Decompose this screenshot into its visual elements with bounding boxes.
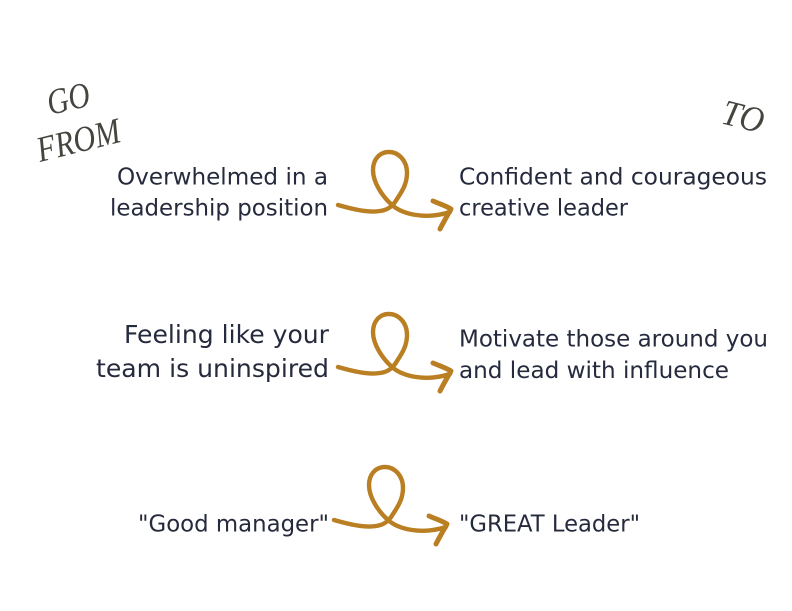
row 1 to text	[459, 164, 767, 222]
row 2 to text	[459, 326, 768, 384]
row 2 to text: Motivate those around you	[459, 326, 768, 352]
row 1 from text	[110, 164, 328, 222]
row 1 to text: creative leader	[459, 196, 629, 222]
row 2 to text: and lead with influence	[459, 358, 729, 384]
row 2 from text	[96, 320, 330, 383]
row 3 to text: "GREAT Leader"	[459, 512, 640, 538]
heading: GO FROM	[31, 74, 126, 170]
heading: GO FROM: GO	[43, 74, 94, 123]
row 3 arrow	[334, 467, 447, 544]
row 2 from text: Feeling like your	[124, 320, 330, 349]
row 3 from text: "Good manager"	[138, 512, 329, 538]
row 1 from text: Overwhelmed in a	[117, 164, 328, 190]
row 2 from text: team is uninspired	[96, 354, 329, 383]
row 2 arrow	[338, 314, 451, 391]
row 1 from text: leadership position	[110, 196, 328, 222]
heading: GO FROM: FROM	[31, 110, 126, 170]
heading: TO: TO	[718, 92, 768, 141]
row 1 to text: Confident and courageous	[459, 164, 767, 190]
row 1 arrow	[338, 152, 451, 229]
